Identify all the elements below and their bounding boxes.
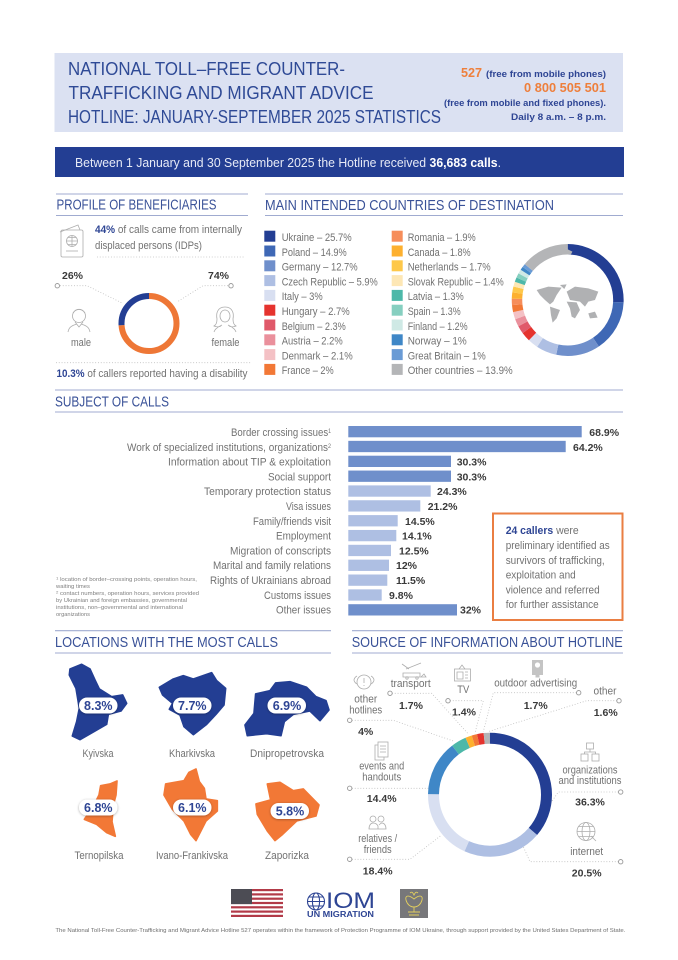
hotline contact details: (free from mobile phones) xyxy=(486,69,606,79)
location: Kyivska: 8.3% xyxy=(84,699,113,713)
location: Kyivska: Kyivska xyxy=(82,748,114,760)
bar values: 12% xyxy=(396,560,418,572)
legend: countries: Austria – 2.2% xyxy=(282,336,343,348)
callout: 24 callers: 24 callers were xyxy=(506,525,579,537)
bar values xyxy=(389,427,620,617)
chart labels: subject of calls: Border crossing issues xyxy=(231,427,344,439)
panel: profile of beneficiaries xyxy=(55,194,251,380)
chart labels: subject of calls: Migration of conscripts xyxy=(230,545,331,557)
source: TV: 1.4% xyxy=(452,706,477,718)
source: other hotlines xyxy=(349,675,383,738)
chart labels: subject of calls: 2 xyxy=(328,444,332,450)
heading: subject of calls: SUBJECT OF CALLS xyxy=(55,394,169,410)
footnotes: location of border–crossing points, operation hours, xyxy=(58,577,197,583)
callout: 24 callers: exploitation and xyxy=(506,570,576,582)
heading: profile: PROFILE OF BENEFICIARIES xyxy=(56,198,216,214)
callout: 24 callers: violence and referred xyxy=(506,584,600,596)
source: organizations and institutions: and institutions xyxy=(558,775,622,787)
location: Zaporizka xyxy=(265,803,310,862)
title: TRAFFICKING AND MIGRANT ADVICE xyxy=(68,82,374,103)
source: other hotlines: 4% xyxy=(358,726,374,738)
label: female: female xyxy=(212,337,240,349)
location: Dnipropetrovska: Dnipropetrovska xyxy=(250,748,325,760)
leader lines xyxy=(348,690,623,864)
chart labels: subject of calls: Visa issues xyxy=(286,501,331,513)
legend: countries: Hungary – 2.7% xyxy=(282,306,350,318)
source: internet: 20.5% xyxy=(572,868,602,880)
footnotes: contact numbers, operation hours, services provided xyxy=(58,591,199,597)
source: internet: internet xyxy=(570,846,604,858)
source: relatives / friends: friends xyxy=(364,844,392,856)
bar values: 30.3% xyxy=(457,457,487,469)
icon: headset xyxy=(354,675,374,689)
chart labels: subject of calls: Employment xyxy=(276,531,332,543)
icon: handouts xyxy=(375,742,388,760)
chart labels: subject of calls: 1 xyxy=(328,429,332,435)
source: other hotlines: hotlines xyxy=(349,704,383,716)
legend: countries: Ukraine – 25.7% xyxy=(282,232,352,244)
heading: locations: LOCATIONS WITH THE MOST CALLS xyxy=(55,635,278,651)
location: Zaporizka: 5.8% xyxy=(276,804,304,818)
bar values: 64.2% xyxy=(573,442,603,454)
source: other xyxy=(594,686,618,719)
location: Ternopilska: Ternopilska xyxy=(74,850,124,862)
hotline contact details: (free from mobile and fixed phones). xyxy=(444,98,606,108)
bar values: 68.9% xyxy=(589,427,620,439)
source: events and handouts: events and xyxy=(359,760,404,772)
icon: passport xyxy=(60,225,83,257)
source: relatives / friends: relatives / xyxy=(358,833,398,845)
source: outdoor advertising: outdoor advertising xyxy=(494,678,577,690)
location: Zaporizka: Zaporizka xyxy=(265,850,310,862)
bar values: 24.3% xyxy=(437,486,467,498)
title: NATIONAL TOLL–FREE COUNTER- xyxy=(68,58,345,79)
callout: 24 callers: survivors of trafficking, xyxy=(506,555,605,567)
icon: org chart xyxy=(581,743,599,761)
source: internet xyxy=(570,822,604,880)
IDP text: 44% of calls came from internally xyxy=(95,224,242,236)
bar values: 14.1% xyxy=(402,531,432,543)
bar values: 11.5% xyxy=(396,575,426,587)
footnotes xyxy=(55,576,199,618)
footer note: The National Toll-Free Counter-Trafficking and Migrant Advice Hotline 527 operates within the framework of Protection Programme of IOM Ukraine, through support provided by the United States Department of State. xyxy=(55,928,626,934)
source: other: 1.6% xyxy=(594,707,618,719)
source: organizations and institutions: 36.3% xyxy=(575,796,606,808)
footnotes: 1 xyxy=(56,576,59,580)
icon: globe xyxy=(577,822,596,841)
source: organizations and institutions xyxy=(558,743,622,808)
legend: countries: Italy – 3% xyxy=(282,291,323,303)
source: outdoor advertising: 1.7% xyxy=(524,700,548,712)
location: Ivano-Frankivska: Ivano-Frankivska xyxy=(156,850,229,862)
location: Ternopilska: 6.8% xyxy=(84,801,113,815)
callout: 24 callers xyxy=(493,514,622,620)
logo: IOM UN Migration xyxy=(307,888,375,919)
legend: countries: Denmark – 2.1% xyxy=(282,350,353,362)
legend: countries: Finland – 1.2% xyxy=(408,321,468,333)
location: Dnipropetrovska: 6.9% xyxy=(273,699,301,713)
footnotes: waiting times xyxy=(55,584,90,590)
bar values: 9.8% xyxy=(389,590,414,602)
hotline contact details: Daily 8 a.m. – 8 p.m. xyxy=(511,112,606,122)
legend: countries: Canada – 1.8% xyxy=(408,247,471,259)
chart labels: subject of calls: Marital and family relations xyxy=(213,560,331,572)
logo: IOM UN Migration: IOM xyxy=(326,888,375,913)
IDP text xyxy=(95,224,242,252)
source: transport: 1.7% xyxy=(399,700,424,712)
legend: countries: Other countries – 13.9% xyxy=(408,365,513,377)
heading: source: SOURCE OF INFORMATION ABOUT HOTLINE xyxy=(352,635,623,651)
footnotes: organizations xyxy=(56,612,90,618)
source: TV: TV xyxy=(457,684,470,696)
legend: countries: Latvia – 1.3% xyxy=(408,291,464,303)
location: Ternopilska xyxy=(74,800,124,862)
countries donut chart xyxy=(517,249,618,351)
source: organizations and institutions: organizations xyxy=(562,764,618,776)
logo: partner emblem xyxy=(400,889,428,918)
chart labels: subject of calls: Social support xyxy=(268,471,332,483)
location: Kharkivska: 7.7% xyxy=(178,699,207,713)
title xyxy=(68,58,441,127)
legend: countries: Norway – 1% xyxy=(408,336,467,348)
total calls banner: Between 1 January and 30 September 2025 the Hotline received 36,683 calls. xyxy=(75,155,501,170)
male share: 26% xyxy=(62,270,84,282)
legend: countries: France – 2% xyxy=(282,365,334,377)
chart labels: subject of calls xyxy=(127,427,332,617)
location: Kyivska xyxy=(79,698,118,760)
source: outdoor advertising xyxy=(494,660,577,712)
hotline contact details: 0 800 505 501 xyxy=(524,81,606,95)
footnotes: institutions, non–governmental and international xyxy=(56,605,183,611)
region maps xyxy=(69,664,329,841)
chart labels: subject of calls: Family/friends visit xyxy=(253,516,332,528)
location: Kharkivska xyxy=(169,698,216,760)
bar values: 14.5% xyxy=(405,516,435,528)
icon: TV xyxy=(454,665,470,681)
chart labels: subject of calls: Rights of Ukrainians abroad xyxy=(210,575,331,587)
source: relatives / friends: 18.4% xyxy=(363,866,393,878)
source donut chart xyxy=(434,738,546,851)
bar values: 32% xyxy=(460,605,482,617)
icon: male xyxy=(68,309,90,332)
female share: 74% xyxy=(208,270,230,282)
bar values: 21.2% xyxy=(428,501,458,513)
callout: 24 callers: for further assistance xyxy=(506,599,599,611)
source: events and handouts xyxy=(359,742,404,805)
source: TV xyxy=(452,665,477,718)
location: Ivano-Frankivska xyxy=(156,800,229,862)
hotline contact details: 527 xyxy=(461,66,482,80)
source: transport: transport xyxy=(391,678,432,690)
bar values: 12.5% xyxy=(399,545,429,557)
chart labels: subject of calls: Other issues xyxy=(276,605,331,617)
legend: countries: Belgium – 2.3% xyxy=(282,321,346,333)
icon: billboard xyxy=(532,660,543,678)
legend: countries: Czech Republic – 5.9% xyxy=(282,276,378,288)
logo: IOM UN Migration: UN MIGRATION xyxy=(307,910,374,919)
legend: countries: Germany – 12.7% xyxy=(282,262,358,274)
heading: destinations: MAIN INTENDED COUNTRIES OF DESTINATION xyxy=(265,198,554,214)
legend: countries xyxy=(264,231,513,377)
icon: world map xyxy=(537,284,598,323)
chart labels: subject of calls: Information about TIP & exploitation xyxy=(168,457,331,469)
legend: countries: Great Britain – 1% xyxy=(408,350,486,362)
bar values: 30.3% xyxy=(457,471,487,483)
icon: people xyxy=(369,816,386,829)
source: events and handouts: handouts xyxy=(362,772,402,784)
bar chart: subject of calls xyxy=(348,426,620,617)
source: events and handouts: 14.4% xyxy=(367,793,397,805)
legend: countries: Slovak Republic – 1.4% xyxy=(408,276,504,288)
icon: female xyxy=(214,307,236,332)
panel: locations with the most calls xyxy=(55,631,331,862)
legend: countries: Poland – 14.9% xyxy=(282,247,347,259)
legend: countries: Netherlands – 1.7% xyxy=(408,262,491,274)
chart labels: subject of calls: Work of specialized institutions, organizations xyxy=(127,442,353,454)
icon: transport xyxy=(402,663,426,679)
source: relatives / friends xyxy=(358,816,398,878)
footnotes: 2 xyxy=(56,590,59,594)
legend: countries: Spain – 1.3% xyxy=(408,306,461,318)
IDP text: displaced persons (IDPs) xyxy=(95,240,202,252)
panel: main intended countries of destination xyxy=(264,194,623,377)
header panel xyxy=(54,53,623,132)
chart labels: subject of calls: Customs issues xyxy=(264,590,331,602)
source: other: other xyxy=(594,686,617,698)
gender donut chart xyxy=(122,296,176,351)
panel: source of information about hotline xyxy=(348,631,623,880)
legend: countries: Romania – 1.9% xyxy=(408,232,476,244)
footnotes: by Ukrainian and foreign embassies, governmental xyxy=(56,598,187,604)
logo: US flag xyxy=(231,889,283,917)
hotline contact details xyxy=(444,66,606,122)
location: Dnipropetrovska xyxy=(250,698,325,760)
total calls banner xyxy=(55,147,624,177)
disability text: 10.3% of callers reported having a disability xyxy=(56,368,248,380)
label: male: male xyxy=(71,337,91,349)
location: Ivano-Frankivska: 6.1% xyxy=(178,801,207,815)
chart labels: subject of calls: Temporary protection status xyxy=(204,486,331,498)
source: other hotlines: other xyxy=(354,694,377,706)
title: HOTLINE: JANUARY-SEPTEMBER 2025 STATISTICS xyxy=(68,106,441,127)
callout: 24 callers: preliminary identified as xyxy=(506,540,610,552)
location: Kharkivska: Kharkivska xyxy=(169,748,216,760)
source: transport xyxy=(391,663,432,712)
